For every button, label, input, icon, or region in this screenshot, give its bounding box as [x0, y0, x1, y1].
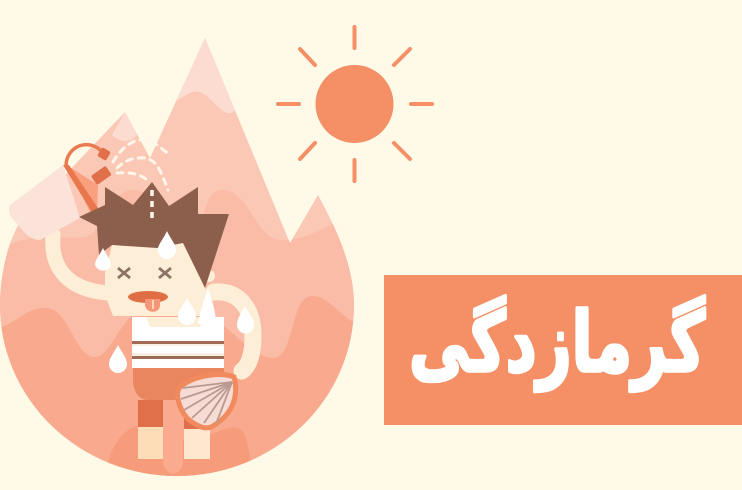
icon: hand fan — [178, 375, 236, 428]
title banner — [384, 275, 742, 425]
head — [105, 243, 211, 316]
icon: water bucket — [9, 145, 112, 240]
character — [9, 140, 254, 474]
flame background — [0, 30, 360, 490]
torso and tank top — [132, 317, 224, 368]
raised arm — [53, 235, 108, 293]
sweat drops — [95, 231, 254, 373]
shorts — [133, 368, 224, 400]
water splash dashes — [113, 140, 170, 190]
icon: sun — [278, 27, 432, 181]
mouth and tongue — [128, 291, 168, 312]
eyes — [118, 268, 171, 278]
right arm — [214, 292, 253, 371]
water stream dashes — [150, 190, 154, 220]
lighter leg gap — [163, 400, 183, 474]
hair — [79, 182, 229, 288]
legs — [138, 400, 163, 436]
